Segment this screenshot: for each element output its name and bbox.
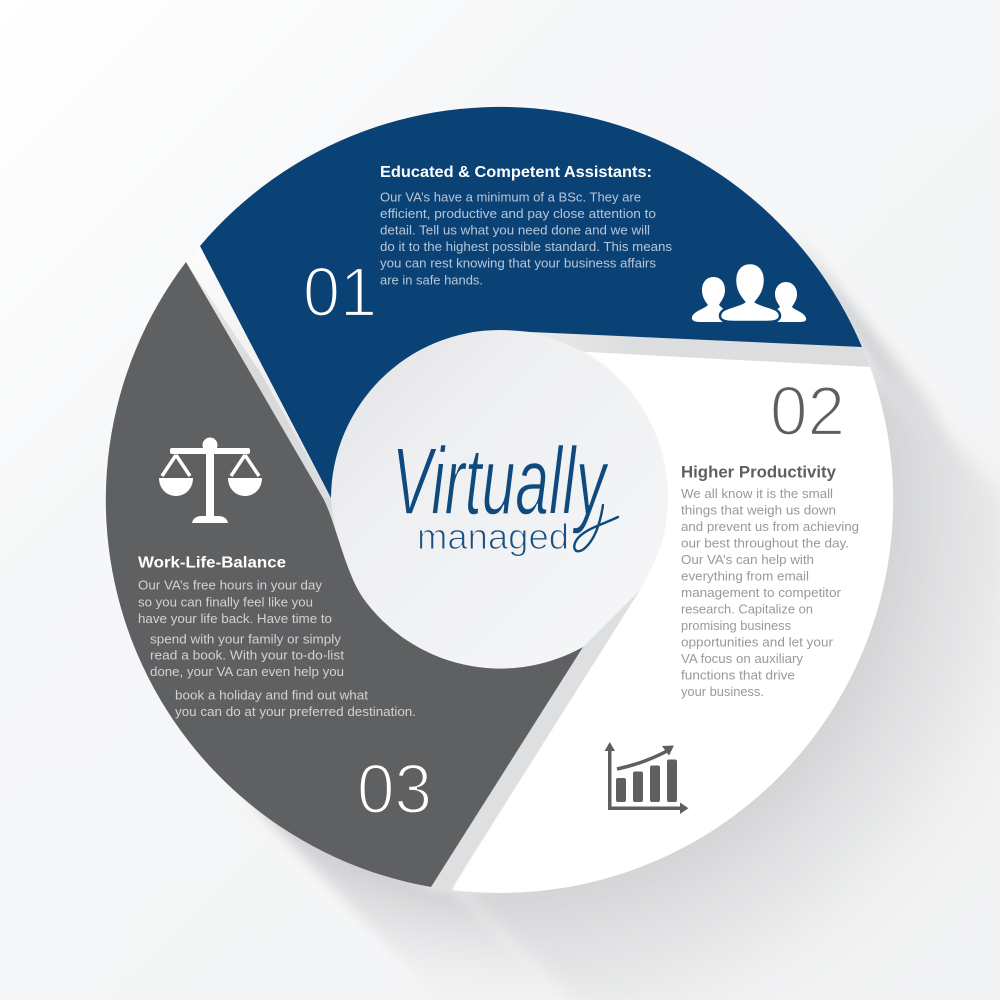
body text 02: your business. (681, 684, 764, 699)
body text 01: efficient, productive and pay close attention to (380, 206, 656, 221)
icon: people (692, 263, 806, 322)
logo: Virtually managed (392, 428, 618, 557)
shadow stripe along grey edge (186, 262, 331, 498)
body text 01: do it to the highest possible standard. This means (380, 239, 672, 254)
long shadow: white segment (451, 367, 1000, 1000)
blue segment shape (200, 107, 862, 498)
body text 01: you can rest knowing that your business affairs (380, 256, 656, 270)
body text 01 (380, 190, 672, 288)
body text 02: our best throughout the day. (681, 536, 849, 550)
long shadow: grey segment (245, 795, 560, 1000)
body text 02: things that weigh us down (681, 502, 836, 518)
body text 02: everything from email (681, 568, 809, 584)
body text 03: done, your VA can even help you (150, 664, 344, 679)
body text 01: detail. Tell us what you need done and we will (380, 222, 650, 238)
body text 03: Our VA’s free hours in your day (138, 578, 322, 592)
long shadow: blue segment (795, 235, 965, 480)
body text 02: and prevent us from achieving (681, 519, 859, 534)
body text 02: promising business (681, 618, 791, 633)
number 01: 01 (303, 253, 377, 331)
white segment shape (452, 352, 893, 893)
body text 03: you can do at your preferred destination. (175, 704, 416, 719)
logo word managed: managed (417, 516, 569, 557)
logo word Virtually: Virtually (392, 428, 609, 535)
number 02: 02 (770, 372, 845, 450)
logo swash (574, 505, 618, 551)
wheel base (431, 590, 640, 889)
heading 01: Educated & Competent Assistants: (380, 164, 652, 181)
body text 03: so you can finally feel like you (138, 594, 313, 610)
panel: 02 higher productivity (452, 352, 893, 893)
body text 02: opportunities and let your (681, 634, 834, 650)
shadow band under blue segment (500, 330, 870, 367)
grey segment shape (106, 262, 583, 887)
panel: 01 educated assistants (200, 107, 862, 498)
shadow band beside grey segment (186, 246, 363, 598)
body text 02: VA focus on auxiliary (681, 651, 803, 666)
icon: balance scales (159, 438, 262, 523)
body text 03 (138, 578, 416, 719)
fold between grey segment and centre (323, 498, 363, 598)
body text 02: functions that drive (681, 668, 795, 682)
body text 03: read a book. With your to-do-list (150, 648, 344, 662)
body text 03: have your life back. Have time to (138, 611, 332, 626)
panel: 03 work-life-balance (106, 262, 583, 887)
body text 03: book a holiday and find out what (175, 688, 368, 702)
centre disc (331, 330, 668, 668)
icon: bar chart with arrow (604, 742, 688, 814)
body text 02 (681, 486, 859, 699)
body text 02: research. Capitalize on (681, 602, 813, 616)
body text 01: are in safe hands. (380, 272, 483, 288)
heading 02: Higher Productivity (681, 464, 837, 482)
body text 01: Our VA’s have a minimum of a BSc. They are (380, 190, 641, 204)
number 03: 03 (357, 750, 432, 828)
body text 02: We all know it is the small (681, 486, 833, 501)
heading 03: Work-Life-Balance (138, 554, 286, 572)
body text 02: Our VA’s can help with (681, 552, 814, 567)
body text 03: spend with your family or simply (150, 632, 341, 646)
body text 02: management to competitor (681, 585, 842, 600)
